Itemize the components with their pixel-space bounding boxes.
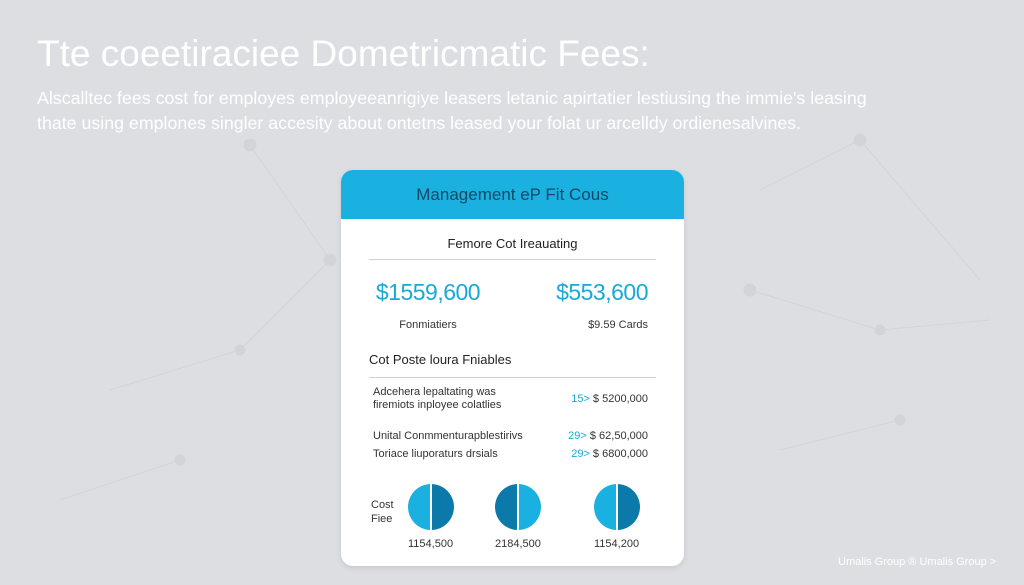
card: 29> $ 6800,000 — [571, 448, 648, 460]
subtitle: Alscalltec fees cost for employes employeeanrigiye leasers letanic apirtatier lestiusing the immie's leasing — [37, 88, 867, 108]
pie legend — [371, 499, 394, 525]
list heading — [369, 352, 656, 378]
card header: Management eP Fit Cous — [416, 185, 609, 204]
pie legend: Fiee — [371, 513, 392, 525]
card header — [341, 170, 684, 219]
stat right: $553,600 — [556, 279, 648, 305]
card: 2184,500 — [495, 538, 541, 550]
card — [341, 170, 684, 566]
card: Adcehera lepaltating was — [373, 386, 496, 398]
footer: Umalis Group ® Umalis Group > — [838, 556, 996, 568]
card: 15> $ 5200,000 — [571, 393, 648, 405]
stat left: $1559,600 — [376, 279, 480, 305]
pie legend: Cost — [371, 499, 394, 511]
list heading: Cot Poste loura Fniables — [369, 352, 511, 367]
stat right: $9.59 Cards — [588, 319, 648, 331]
subtitle — [37, 88, 867, 133]
card: 29> $ 62,50,000 — [568, 430, 648, 442]
list rows — [373, 386, 648, 460]
pie charts — [408, 484, 640, 530]
stat left: Fonmiatiers — [399, 319, 457, 331]
section heading: Femore Cot Ireauating — [447, 236, 578, 251]
subtitle: thate using emplones singler accesity about ontetns leased your folat ur arcelldy ordienesalvines. — [37, 113, 801, 133]
section heading — [369, 236, 656, 260]
card: firemiots inployee colatlies — [373, 399, 501, 411]
card: Unital Conmmenturapblestirivs — [373, 430, 523, 442]
pie values — [408, 538, 639, 550]
card: 1154,200 — [594, 538, 639, 550]
card: Toriace liuporaturs drsials — [373, 448, 498, 460]
card: 1154,500 — [408, 538, 453, 550]
stat right — [556, 279, 648, 331]
title: Tte coeetiraciee Dometricmatic Fees: — [37, 33, 650, 74]
stat left — [376, 279, 480, 331]
